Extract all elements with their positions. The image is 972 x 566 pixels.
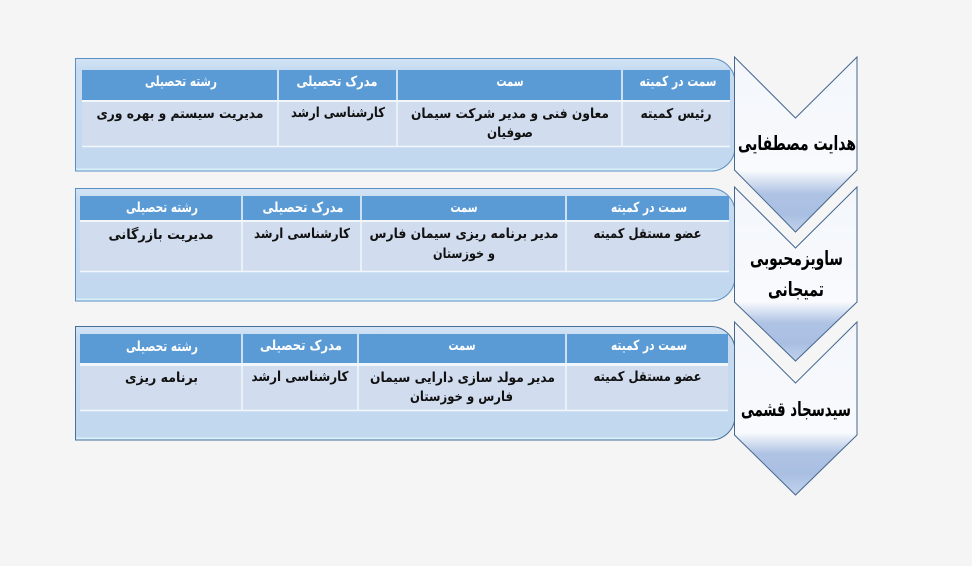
table: second member [80,196,729,272]
cell: committee role: عضو مستقل کمیته [594,226,702,242]
cell: job title [411,106,609,141]
cell: field of study: مدیریت بازرگانی [108,226,214,243]
name: second member [750,246,843,301]
panel: third member details [76,326,735,440]
cell: job title: معاون فنی و مدیر شرکت سیمان [411,106,609,122]
cell: field of study: برنامه ریزی [125,370,198,386]
panel: second member details [76,188,735,301]
header: position in committee: سمت در کمیته [611,200,687,216]
header: position in committee: سمت در کمیته [611,338,687,354]
cell: committee role: رئیس کمیته [640,106,712,122]
name: first member: هدایت مصطفایی [738,131,856,155]
header: position: سمت [450,200,478,216]
cell: job title: و خوزستان [433,246,495,262]
header: position: سمت [496,74,524,90]
header: degree: مدرک تحصیلی [260,338,342,354]
cell: job title [370,370,555,405]
header: field of study: رشته تحصیلی [126,200,198,216]
chevron: third member name [734,322,857,495]
cell: job title [370,226,558,262]
cell: degree: کارشناسی ارشد [254,226,350,242]
chevron: first member name [734,57,857,232]
table: first member [82,70,730,146]
chevron: second member name [734,187,857,361]
header: position in committee: سمت در کمیته [640,74,716,90]
panel: first member details [76,58,735,171]
cell: job title: مدیر مولد سازی دارایی سیمان [370,370,555,386]
header: position: سمت [448,338,476,354]
header: degree: مدرک تحصیلی [262,200,344,216]
cell: committee role: عضو مستقل کمیته [594,369,702,385]
cell: field of study: مدیریت سیستم و بهره وری [96,106,264,122]
header: degree: مدرک تحصیلی [296,74,378,90]
header: field of study: رشته تحصیلی [126,339,198,355]
cell: degree: کارشناسی ارشد [291,105,385,121]
name: second member: ساویزمحبوبی [750,246,843,270]
table: third member [80,334,728,410]
cell: job title: مدیر برنامه ریزی سیمان فارس [370,226,558,242]
cell: job title: صوفیان [487,125,533,141]
name: third member: سیدسجاد قشمی [741,397,851,421]
name: second member: تمیجانی [768,277,824,301]
cell: degree: کارشناسی ارشد [252,369,349,385]
header: field of study: رشته تحصیلی [145,74,217,90]
cell: job title: فارس و خوزستان [410,389,513,405]
